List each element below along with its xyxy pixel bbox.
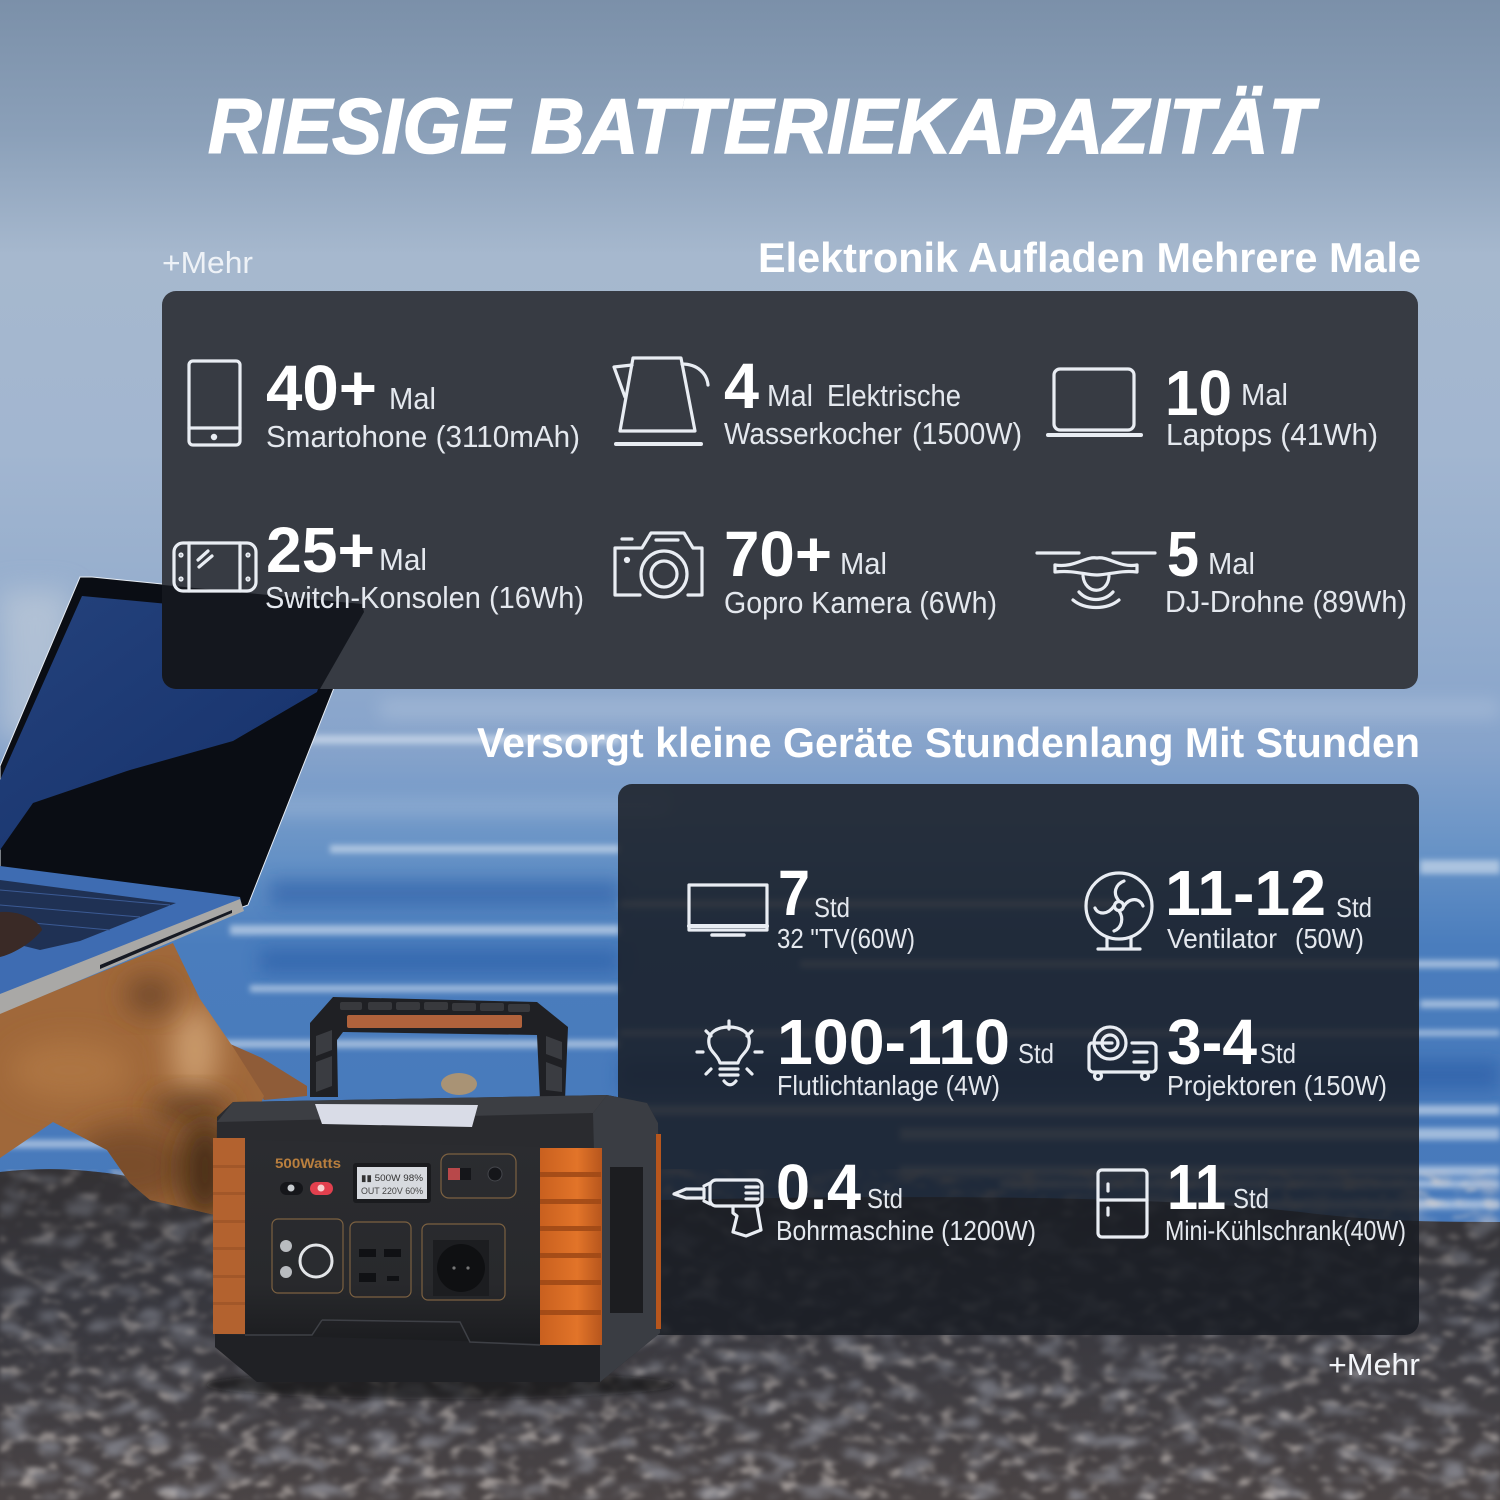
portable power station [205, 997, 675, 1399]
stat: kettle: Elektrische [827, 378, 961, 413]
+Mehr note, upper panel: +Mehr [162, 245, 253, 280]
stat: drill: 0.4 [776, 1151, 861, 1223]
stat: kettle: Mal [767, 378, 813, 413]
power station AC outlet [422, 1224, 505, 1300]
power station vent [610, 1167, 643, 1313]
power station body [215, 1095, 660, 1382]
stat: gopro camera: 70+ [724, 518, 832, 590]
stat: fan: (50W) [1295, 923, 1364, 954]
stat: mini fridge: Mini-Kühlschrank(40W) [1165, 1215, 1406, 1246]
heading: Versorgt kleine Geräte: Versorgt kleine Geräte Stundenlang Mit Stunden [477, 719, 1420, 766]
power station DC port panel [272, 1219, 343, 1293]
laptop and legs photo [0, 576, 334, 1214]
stat: gopro camera [724, 518, 997, 620]
stat: smartphone: 40+ [266, 352, 377, 424]
power station handle [310, 997, 568, 1100]
stat: TV: Std [814, 892, 850, 923]
stat: floodlight: Flutlichtanlage (4W) [777, 1070, 1000, 1101]
laptop keyboard deck [0, 866, 244, 1014]
power station buttons [280, 1182, 333, 1195]
stat: switch consoles [265, 514, 584, 615]
icon: television [689, 885, 767, 935]
stat: drone: 5 [1167, 518, 1199, 590]
stat: fan: Std [1336, 892, 1372, 923]
icon: smartphone [189, 361, 240, 445]
stat: mini fridge: Std [1233, 1183, 1269, 1214]
stat: switch consoles: Switch-Konsolen (16Wh) [265, 580, 584, 615]
laptop screen [0, 577, 364, 908]
icon: game console [174, 543, 256, 591]
stat: floodlight: 100-110 [777, 1006, 1010, 1078]
stat: kettle: (1500W) [912, 416, 1022, 451]
stat: laptops: Mal [1241, 377, 1288, 412]
legs [0, 930, 307, 1230]
stat: TV [777, 857, 915, 954]
stat: smartphone [266, 352, 580, 454]
stat: smartphone: Smartohone (3110mAh) [266, 419, 580, 454]
icon: laptop [1048, 369, 1141, 435]
stat: drill: Bohrmaschine (1200W) [776, 1215, 1036, 1246]
icon: drone [1037, 553, 1155, 608]
title: RIESIGE BATTERIEKAPAZITÄT [208, 82, 1320, 170]
stat: fan: 11-12 [1165, 857, 1326, 929]
stat: TV: 7 [778, 857, 810, 929]
stat: drone: DJ-Drohne (89Wh) [1165, 584, 1407, 619]
stat: mini fridge [1165, 1151, 1406, 1246]
power station input ports [441, 1154, 516, 1198]
icon: projector [1089, 1027, 1156, 1080]
+Mehr note, lower panel: +Mehr [1328, 1347, 1420, 1382]
stat: kettle: 4 [724, 350, 759, 422]
icon: camera [615, 533, 702, 597]
stat: kettle: Wasserkocher [724, 416, 902, 451]
stat: laptops [1165, 357, 1378, 452]
stat: floodlight: Std [1018, 1038, 1054, 1069]
icon: fan [1086, 873, 1152, 949]
power station orange bumpers [213, 1134, 661, 1345]
heading: Elektronik Aufladen: Elektronik Aufladen Mehrere Male [758, 234, 1421, 281]
power station LCD display [353, 1163, 431, 1203]
stat: drill [776, 1151, 1036, 1246]
stat: TV: 32 "TV(60W) [777, 923, 915, 954]
icon: light bulb [697, 1021, 762, 1085]
icon: kettle [614, 358, 708, 444]
pebble beach [0, 1169, 1500, 1500]
power station LCD display: OUT 220V 60% [361, 1186, 423, 1196]
stat: smartphone: Mal [389, 381, 436, 416]
stat: switch consoles: Mal [379, 542, 427, 577]
stat: projector: 3-4 [1167, 1006, 1257, 1078]
stat: kettle [724, 350, 1022, 451]
ground shadow [205, 1371, 675, 1399]
stat: gopro camera: Gopro Kamera (6Wh) [724, 585, 997, 620]
power station brand: 500Watts [275, 1155, 341, 1171]
panel: device run times [618, 784, 1419, 1335]
panel: device recharge counts [80, 291, 1418, 689]
stat: drone [1165, 518, 1407, 619]
stat: projector: Projektoren (150W) [1167, 1070, 1387, 1101]
stat: fan: Ventilator [1167, 923, 1277, 954]
stat: drill: Std [867, 1183, 903, 1214]
stat: projector [1167, 1006, 1387, 1101]
stat: switch consoles: 25+ [266, 514, 375, 586]
icon: mini fridge [1098, 1170, 1147, 1237]
laptop seen through panel [162, 585, 364, 689]
power station USB port panel [350, 1222, 411, 1297]
icon: drill [674, 1180, 762, 1236]
stat: fan [1165, 857, 1372, 954]
stat: gopro camera: Mal [840, 546, 887, 581]
stat: floodlight [777, 1006, 1054, 1101]
stat: drone: Mal [1208, 546, 1255, 581]
stat: laptops: 10 [1165, 357, 1232, 429]
stat: mini fridge: 11 [1167, 1151, 1226, 1223]
power station LCD display: ▮▮ 500W 98% [361, 1173, 423, 1183]
stat: laptops: Laptops (41Wh) [1166, 417, 1378, 452]
stat: projector: Std [1260, 1038, 1296, 1069]
